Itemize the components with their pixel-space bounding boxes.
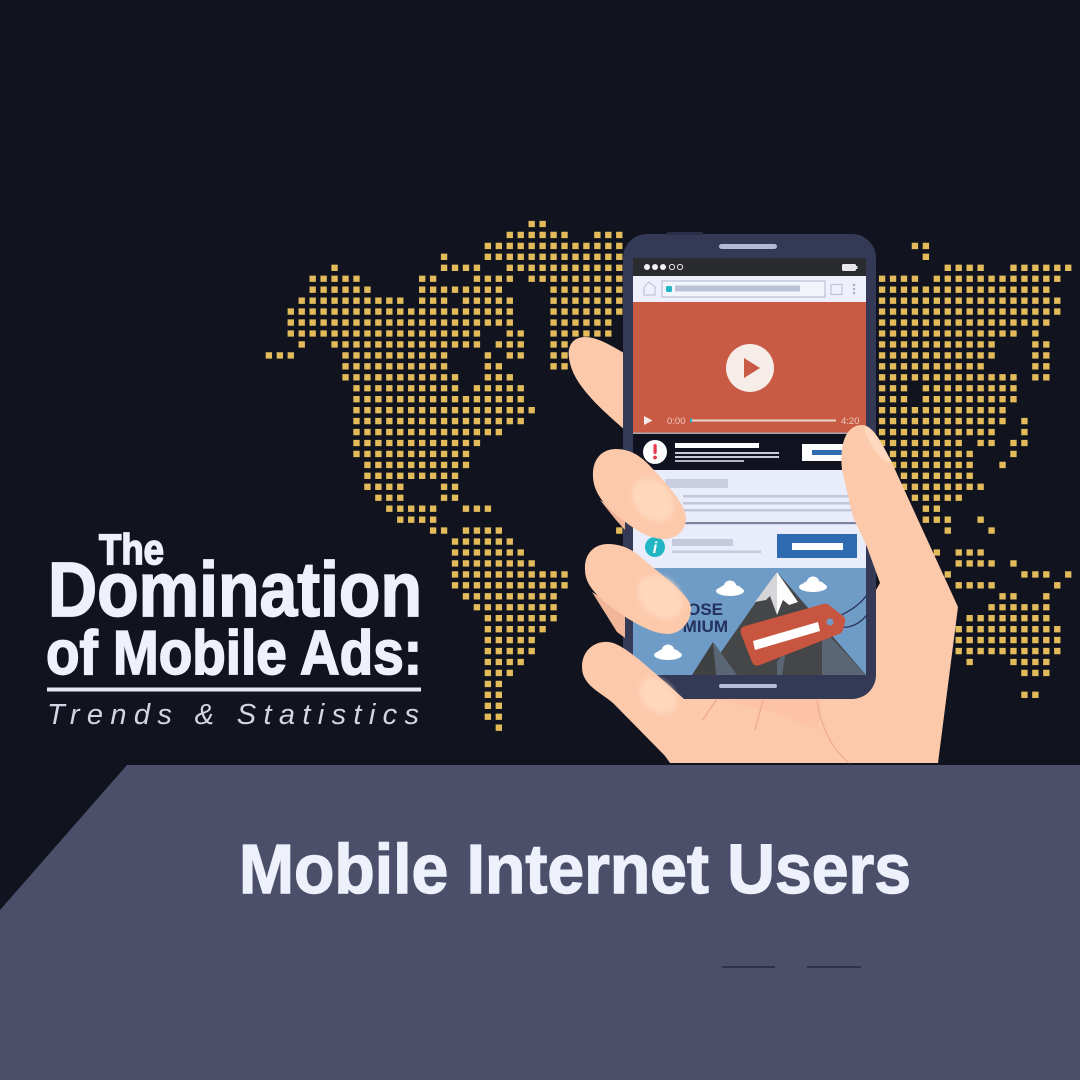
- title: Domination: Domination: [48, 547, 422, 633]
- home button: [719, 684, 777, 688]
- mountains: [692, 572, 866, 675]
- video player: 0:00: [667, 416, 686, 427]
- cloud: [654, 644, 682, 660]
- finger: ring: [585, 544, 691, 638]
- browser bar: [633, 276, 866, 302]
- article panel: i: [653, 540, 658, 557]
- title: The: The: [99, 526, 164, 574]
- ad headline: OSE: [687, 600, 723, 619]
- article panel: [633, 470, 866, 568]
- band seam marks: [722, 966, 861, 968]
- section heading: Mobile Internet Users: [239, 830, 911, 908]
- palm shading: [688, 699, 849, 763]
- finger: little: [582, 642, 720, 763]
- speaker: [719, 244, 777, 249]
- screen: [633, 258, 870, 675]
- video player: 4:20: [841, 416, 860, 427]
- price tag: [740, 604, 845, 666]
- title rule: [47, 688, 421, 692]
- player controls: [644, 416, 652, 425]
- title block: [46, 526, 422, 688]
- smartphone: [623, 232, 876, 699]
- phone body: [623, 234, 876, 699]
- subtitle: Trends & Statistics: [47, 699, 419, 731]
- title: of Mobile Ads: of Mobile Ads:: [46, 619, 422, 688]
- finger: middle: [593, 449, 686, 539]
- dotted world map: [266, 224, 1076, 728]
- status bar: [633, 258, 866, 276]
- thumb: [841, 425, 958, 763]
- cloud: [799, 576, 827, 592]
- cloud: [716, 580, 744, 596]
- video player: [633, 302, 866, 434]
- palm behind phone: [640, 640, 938, 763]
- price tag string: [841, 595, 866, 628]
- ad banner: [633, 568, 870, 675]
- play button: [726, 344, 774, 392]
- bottom band: [0, 765, 1080, 1080]
- index finger behind phone: [569, 337, 625, 430]
- alert strip: [633, 434, 866, 470]
- top side button: [667, 232, 703, 235]
- ad headline second line: MIUM: [683, 617, 728, 636]
